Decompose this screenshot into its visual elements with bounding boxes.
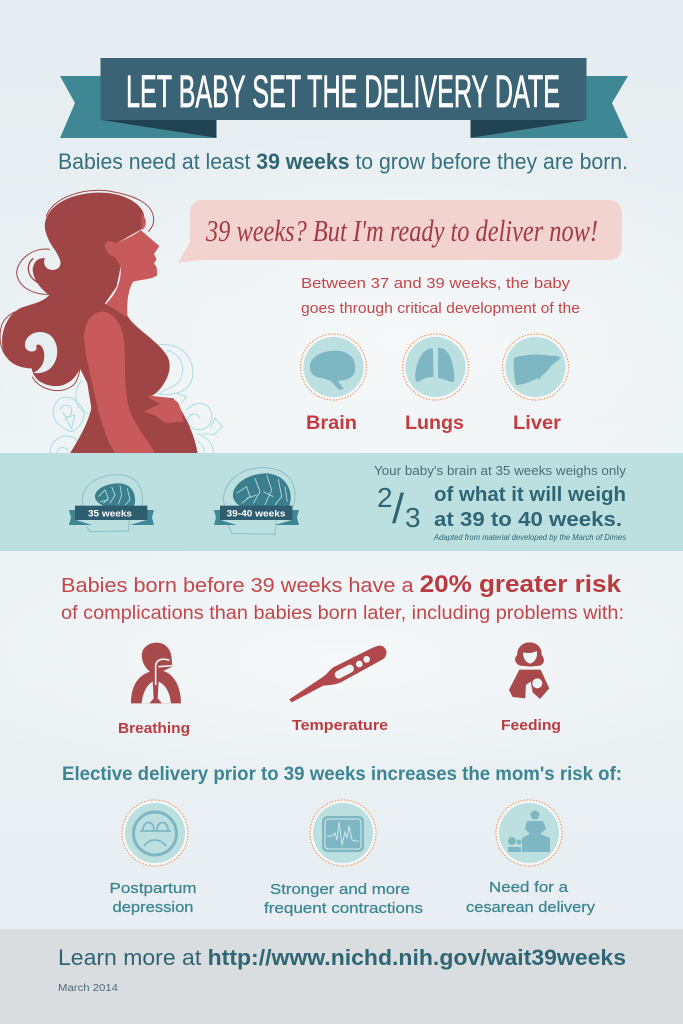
intro text [301, 275, 580, 317]
title banner [60, 58, 628, 138]
brain weight fact: / [392, 485, 404, 532]
hand [144, 395, 183, 423]
label: postpartum depression [110, 880, 196, 916]
subtitle: Babies need at least 39 weeks to grow before they are born. [58, 149, 628, 174]
dress [70, 304, 198, 453]
icon: cesarean delivery [496, 800, 562, 866]
icon: lungs [402, 334, 468, 400]
brain weight fact: Your baby's brain at 35 weeks weighs only [374, 463, 627, 478]
icon: contraction monitor [310, 800, 376, 866]
arm [84, 312, 155, 453]
label: postpartum depression: Postpartum [110, 880, 196, 897]
risk statement: Babies born before 39 weeks have a 20% greater risk [61, 571, 622, 598]
label: contractions [264, 881, 423, 917]
brain weight fact: at 39 to 40 weeks. [434, 509, 622, 531]
brain at 35 weeks [69, 475, 154, 532]
label: Breathing: Breathing [118, 720, 190, 737]
icon: thermometer [289, 646, 386, 702]
label: postpartum depression: depression [112, 899, 194, 916]
label: cesarean delivery: Need for a [489, 879, 569, 896]
label: Temperature: Temperature [292, 717, 388, 734]
speech bubble [178, 200, 622, 263]
face and neck [105, 230, 159, 319]
label: 35 weeks: 35 weeks [88, 508, 132, 518]
hair curl cut-outs [25, 332, 57, 373]
brain weight fact [374, 463, 627, 542]
footer [0, 929, 683, 1024]
brain at 39-40 weeks [214, 468, 299, 534]
icon: liver [502, 334, 568, 400]
footer link: Learn more at http://www.nichd.nih.gov/wait39weeks [58, 945, 626, 970]
hair outlines [0, 190, 154, 391]
icon: brain [300, 334, 366, 400]
date: March 2014 [58, 983, 118, 994]
label: Lungs: Lungs [405, 413, 464, 434]
label: 39-40 weeks: 39-40 weeks [226, 508, 285, 518]
label: Liver: Liver [513, 413, 562, 434]
hair [2, 193, 144, 410]
brain weight fact: of what it will weigh [434, 484, 626, 506]
elective delivery heading: Elective delivery prior to 39 weeks increases the mom's risk of: [62, 764, 622, 785]
risk statement: of complications than babies born later, including problems with: [61, 603, 624, 624]
icon: sad face [122, 800, 188, 866]
decorative swirls [50, 345, 223, 453]
label: Feeding: Feeding [501, 717, 561, 734]
label: contractions: frequent contractions [264, 900, 423, 917]
intro text: Between 37 and 39 weeks, the baby [301, 275, 571, 292]
label: Brain: Brain [306, 413, 357, 434]
risk statement [61, 571, 624, 624]
brain weight fact: Adapted from material developed by the March of Dimes [433, 533, 626, 542]
icon: feeding [509, 642, 549, 699]
pregnant woman silhouette [0, 190, 223, 453]
label: cesarean delivery: cesarean delivery [466, 899, 596, 916]
brain weight fact: 3 [405, 502, 421, 533]
brain weight fact: 2 [377, 482, 393, 513]
intro text: goes through critical development of the [301, 300, 580, 317]
band: brain comparison [0, 453, 683, 551]
label: contractions: Stronger and more [270, 881, 410, 898]
icon: breathing [131, 643, 181, 703]
label: cesarean delivery [466, 879, 596, 916]
